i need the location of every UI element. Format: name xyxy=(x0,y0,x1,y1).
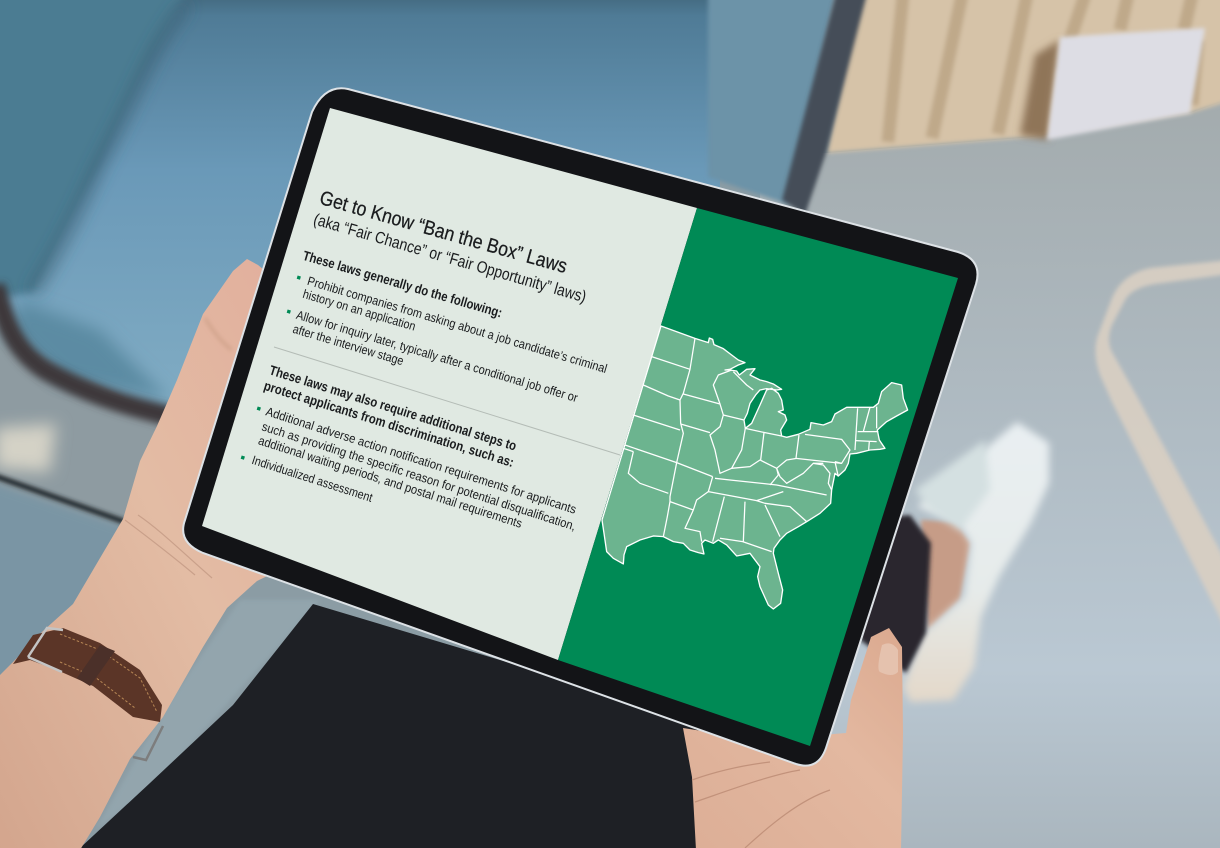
left hand and forearm xyxy=(0,259,300,848)
bullet three: Additional adverse action notification requirements for applicants xyxy=(264,405,578,517)
bullet four: Individualized assessment xyxy=(250,453,375,505)
right hand xyxy=(683,628,903,848)
divider line xyxy=(274,347,620,455)
chair right arm xyxy=(708,0,836,205)
box shadow on the wood xyxy=(1020,40,1060,140)
buckle xyxy=(28,628,63,672)
map of the United States xyxy=(602,326,908,609)
dark trouser leg xyxy=(860,515,931,673)
chair back cushion xyxy=(0,0,186,300)
map: state borders xyxy=(623,338,878,552)
lower ring xyxy=(133,726,163,760)
dark rug edge xyxy=(0,476,125,522)
chair lower left shade xyxy=(10,300,170,400)
section two: additional steps: protect applicants from discrimination, such as: xyxy=(262,378,516,470)
strap stitching xyxy=(60,634,157,712)
white box on floor xyxy=(1047,28,1205,140)
palm creases xyxy=(692,762,830,848)
map: land outline xyxy=(602,326,908,609)
bullet two: Allow for inquiry later, typically after a conditional job offer or xyxy=(295,308,579,405)
shoe laces xyxy=(915,440,990,530)
tablet body xyxy=(183,88,978,766)
dark chair frame xyxy=(782,0,868,215)
wrist creases xyxy=(125,515,212,578)
floor blue grey xyxy=(0,482,125,690)
heading xyxy=(311,187,588,306)
tablet screen left panel xyxy=(202,108,697,660)
light patch on the floor xyxy=(0,424,56,472)
bullet three: additional waiting periods, and postal mail requirements xyxy=(257,434,524,531)
white shoe xyxy=(903,422,1049,702)
bullet two: after the interview stage xyxy=(291,322,405,368)
tablet screen right green panel xyxy=(558,208,958,746)
section one: what the laws do xyxy=(287,248,609,405)
strap keeper xyxy=(77,645,115,686)
floor lower left xyxy=(0,340,175,530)
chair crease xyxy=(33,5,186,293)
bullet one: history on an application xyxy=(301,287,417,334)
dark knit trousers xyxy=(70,604,700,848)
bullet three: such as providing the specific reason for potential disqualification, xyxy=(260,420,578,533)
section two heading: These laws may also require additional steps to xyxy=(268,363,518,454)
chair base rim xyxy=(0,285,175,417)
thumb base shadow xyxy=(205,318,232,350)
blue chair seat xyxy=(0,0,720,420)
section one heading: These laws generally do the following: xyxy=(301,248,504,320)
bullet one: Prohibit companies from asking about a job candidate’s criminal xyxy=(306,274,609,376)
floor right xyxy=(760,95,1220,848)
thumb nail xyxy=(878,643,898,675)
glass table edge xyxy=(1095,260,1220,628)
ankle xyxy=(921,520,971,630)
wood wall panels xyxy=(827,0,1220,153)
subtitle line: (aka “Fair Chance” or “Fair Opportunity” laws) xyxy=(311,211,588,306)
wristwatch strap xyxy=(13,628,163,760)
title line: Get to Know “Ban the Box” Laws xyxy=(317,187,569,278)
section two: additional steps xyxy=(241,363,578,533)
